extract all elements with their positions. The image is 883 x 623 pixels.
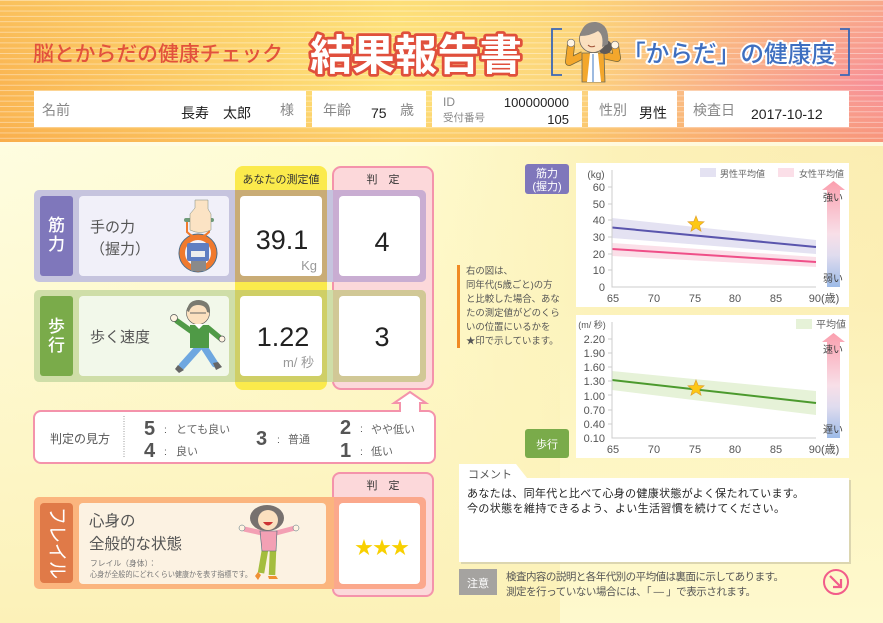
side note: ★印で示しています。 [466,335,559,346]
comment box: 今の状態を維持できるよう、よい生活習慣を続けてください。 [467,501,785,515]
comment box: あなたは、同年代と比べて心身の健康状態がよく保たれています。 [467,486,804,500]
line chart: grip strength: 85 [770,293,782,305]
subtitle: brain and body health check: 脳とからだの健康チェック [33,43,283,66]
judgement legend: 2 [340,417,351,439]
icon: star marker [688,380,704,395]
tick labels: (m/ 秒) [578,319,606,330]
judgement legend: : [164,424,167,436]
panel: frailty row: 判 定 [366,479,400,492]
arrow: strong / weak [822,181,845,287]
panel: frailty row: 心身の [89,512,136,530]
side note [457,265,560,348]
info bar: id: ID [443,95,455,109]
bracket [552,29,849,75]
side note: たの測定値がどのくら [466,307,560,318]
judgement legend: 3 [256,428,267,450]
axes [608,322,816,438]
tick labels: 1.60 [584,362,605,374]
line chart: walking speed: 85 [770,444,782,456]
judgement legend: 1 [340,440,351,462]
panel: muscle strength row: 筋 [48,216,65,235]
panel: walking row: 行 [48,336,65,355]
info bar: id: 受付番号 [443,111,485,124]
chart label: grip: (握力) [532,179,562,193]
comment box [459,464,851,564]
panel: walking row: 3 [374,322,390,352]
chart label: grip [525,164,569,194]
info bar: name: 名前 [42,102,70,118]
panel: walking row [34,290,426,382]
line chart: walking speed: 速い [823,344,843,356]
panel: walking row: 歩く速度 [90,329,150,346]
panel: muscle strength row: 手の力 [90,219,135,236]
judgement legend: やや低い [371,423,415,436]
bands and lines [612,218,816,254]
label: frailty [40,503,73,583]
judgement legend: : [360,423,363,435]
tick labels: (kg) [587,170,605,181]
judgement legend: : [164,446,167,458]
judgement legend: 普通 [288,432,310,446]
line chart: walking speed: 65 [607,444,619,456]
chart label: walking: 歩行 [536,437,558,451]
icon: walking man [170,300,225,373]
judgement column: 判 定 [366,173,400,186]
panel: frailty row: フレイル [46,507,68,579]
legend [700,168,716,177]
side note: 同年代(5歳ごと)の方 [466,279,552,290]
line chart: grip strength: 65 [607,293,619,305]
panel: muscle strength row: Kg [301,258,317,273]
judgement column [333,167,433,389]
info bar: sex: 男性 [639,105,667,121]
axes [608,170,816,287]
caution note: 測定を行っていない場合には、「 ― 」で表示されます。 [506,585,756,598]
info bar: sex [588,91,677,127]
side note: いの位置にいるかを [466,321,550,332]
icon: star marker [688,216,704,231]
caution note [459,569,784,598]
side note: と比較した場合、あな [466,293,560,304]
caution note: 検査内容の説明と各年代別の平均値は裏面に示してあります。 [506,570,784,583]
tick labels: 50 [593,199,605,211]
line chart: grip strength [576,163,849,307]
title: results report: 結果報告書 [310,32,522,79]
info bar: age: 75 [371,105,387,121]
line chart: grip strength: 弱い [823,273,843,285]
judgement legend: 5 [144,418,155,440]
line chart: grip strength: 男性平均値 [720,168,765,179]
panel: muscle strength row: 力 [48,235,65,254]
panel: muscle strength row: （握力） [90,241,150,258]
caution note: 注意 [467,577,489,590]
value: grip [240,196,322,276]
panel: frailty row: フレイル（身体）： [90,558,156,568]
info bar: exam date [684,91,849,127]
tick labels: 0.40 [584,419,605,431]
tick labels: 10 [593,265,605,277]
tick labels: 1.00 [584,391,605,403]
info bar: name: 長寿 太郎 [181,105,251,121]
frailty judgement column [333,473,433,596]
line chart: grip strength: 75 [689,293,701,305]
chart label: walking [525,429,569,458]
judgement legend: 4 [144,440,156,462]
judgement: walking [339,296,420,376]
line chart: grip strength: 80 [729,293,741,305]
info bar: id: 105 [547,112,569,127]
panel: muscle strength row [34,190,426,282]
judgement legend: : [277,434,280,446]
body health heading with bracket and figure [552,22,849,82]
panel: frailty row: ★★★ [355,538,409,558]
line chart: walking speed: 75 [689,444,701,456]
tick labels: 2.20 [584,334,605,346]
line chart: walking speed: 70 [648,444,660,456]
panel: frailty row: 全般的な状態 [89,535,182,553]
info bar: age: 歳 [400,102,414,118]
panel: muscle strength row: 4 [374,227,390,257]
chart label: grip: 筋力 [536,166,558,180]
band and line [612,371,816,415]
label: muscle [40,196,73,276]
info bar: id: 100000000 [504,95,569,110]
info bar: age [312,91,426,127]
icon: grip dynamometer [179,200,217,272]
icon: cheering woman [239,505,299,580]
judgement legend: 低い [371,445,393,458]
info bar: age: 年齢 [323,102,351,118]
icon: next page arrow [824,570,848,594]
legend [796,319,812,329]
panel: frailty row: 心身が全般的にどれくらい健康かを表す指標です。 [90,569,252,579]
judgement legend: 良い [176,445,198,458]
judgement: grip [339,196,420,276]
heading text: 「からだ」の健康度 [622,41,835,68]
info bar: name [34,91,306,127]
panel: walking row: m/ 秒 [283,355,314,370]
tick labels: 1.30 [584,376,605,388]
judgement legend: 判定の見方 [50,431,110,446]
line chart: walking speed [576,315,849,458]
icon: woman flexing [567,22,619,82]
info bar: id [432,91,582,127]
value: walking speed [240,296,322,376]
panel: frailty row [34,473,433,596]
tick labels: 0.10 [584,433,605,445]
name panel [79,503,326,584]
tick labels: 60 [593,182,605,194]
label: walking [40,296,73,376]
line chart: grip strength: 90(歳) [809,292,839,305]
arrow: fast / slow [822,333,845,438]
judgement: stars [339,503,420,584]
tick labels: 30 [593,232,605,244]
comment box: コメント [468,469,512,481]
tick labels: 0.70 [584,405,605,417]
judgement legend: とても良い [176,423,230,436]
panel: walking row: 1.22 [257,322,309,352]
name panel [79,296,229,376]
panel: muscle strength row: 39.1 [256,225,308,255]
tick labels: 20 [593,249,605,261]
line chart: grip strength: 70 [648,293,660,305]
tick labels [578,319,606,445]
judgement legend [34,392,435,463]
tick labels: 1.90 [584,348,605,360]
panel: walking row: 歩 [48,317,65,336]
line chart: walking speed: 遅い [823,424,843,436]
info bar: exam date: 2017-10-12 [751,106,823,122]
line chart: walking speed: 90(歳) [809,443,839,456]
line chart: walking speed: 平均値 [816,318,846,331]
side note: 右の図は、 [466,265,513,276]
tick labels [587,170,605,294]
info bar: exam date: 検査日 [693,102,735,118]
info bar: name: 様 [280,102,294,118]
measured value column [235,166,327,390]
measured value column: あなたの測定値 [242,172,320,186]
info bar: sex: 性別 [599,102,627,118]
line chart: grip strength: 強い [823,191,843,204]
line chart: walking speed: 80 [729,444,741,456]
name panel [79,196,229,276]
tick labels: 40 [593,215,605,227]
line chart: grip strength: 女性平均値 [799,168,844,179]
tick labels: 0 [599,282,605,294]
judgement legend: : [360,446,363,458]
